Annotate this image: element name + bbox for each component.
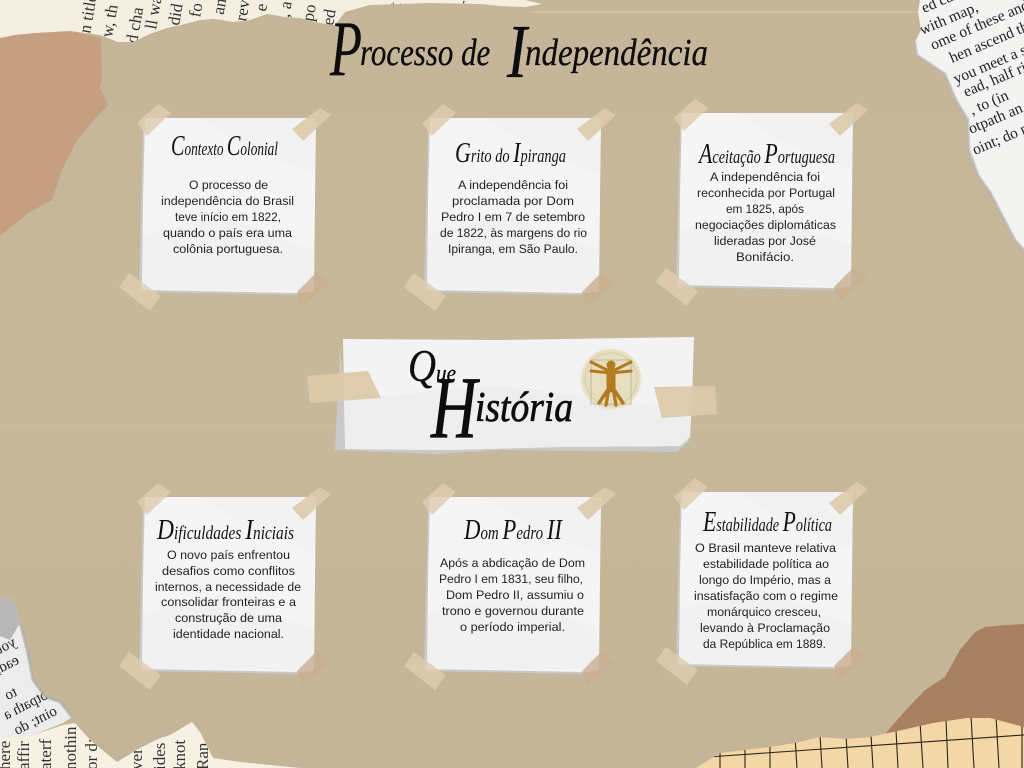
body text: consolidar fronteiras e a [161,595,296,609]
body text: longo do Império, mas a [699,573,831,587]
torn brown paper bottom right [885,624,1024,735]
body text: O Brasil manteve relativa [695,541,836,555]
heading: Estabilidade Política [702,506,832,538]
body text: negociações diplomáticas [695,218,836,232]
body text: identidade nacional. [173,627,284,641]
note: Dificuldades Iniciais [119,483,331,690]
body text: reconhecida por Portugal [697,186,835,200]
body text: trono e governou durante [442,604,584,618]
body text: Pedro I em 7 de setembro [441,210,585,224]
banner paper [335,337,694,454]
script word História: H [430,360,480,457]
script word Que: Q [408,340,436,391]
body text: construção de uma [175,611,282,625]
body text [155,548,301,641]
tape right [654,386,717,418]
body text: teve início em 1822, [175,210,281,224]
note: Contexto Colonial [119,104,331,311]
torn book page top: , a [274,0,296,19]
torn book page top: w, th [97,3,122,39]
title: rocesso de [360,32,498,74]
body text: de 1822, às margens do rio [440,226,587,240]
script word História: istória [475,385,573,431]
body text: lideradas por José [714,234,816,248]
body text: Pedro I em 1831, seu filho, [439,572,583,586]
torn newspaper top right: otpath an [966,100,1024,138]
torn newspaper bottom left: oint; do [11,703,60,739]
torn book page top: e [251,2,271,13]
body text: insatisfação com o regime [694,589,838,603]
body text: monárquico cresceu, [707,605,821,619]
body text [161,178,294,256]
note: Aceitação Portuguesa [656,99,868,306]
body text [440,178,587,256]
grid paper bottom right [696,716,1024,768]
torn newspaper bottom left: otpath a [1,687,51,723]
body text: A independência foi [458,178,568,192]
torn newspaper bottom left: to [2,684,20,704]
note: Grito do Ipiranga [404,104,616,311]
torn newspaper top right: with map, [917,0,981,39]
body text: da República em 1889. [703,637,826,651]
icon: Vitruvian man seal [581,349,641,409]
body text: Dom Pedro II, assumiu o [446,588,584,602]
note: Estabilidade Política [656,478,868,685]
body text: internos, a necessidade de [155,580,301,594]
title: ndependência [525,32,708,74]
torn newspaper top right [915,0,1024,250]
torn brown paper top left [0,31,108,236]
note: Dom Pedro II [404,483,616,690]
body text: O processo de [189,178,268,192]
body text: colônia portuguesa. [173,242,283,256]
body text: A independência foi [710,170,820,184]
body text: desafios como conflitos [162,564,295,578]
heading: Dom Pedro II [463,514,563,546]
torn book page bottom left [0,722,300,768]
torn book page top: ed [318,7,340,27]
torn book page top [0,0,542,45]
torn newspaper top right: , to (in [967,87,1011,119]
body text: O novo país enfrentou [167,548,290,562]
body text: independência do Brasil [161,194,294,208]
body text: Bonifácio. [736,250,794,264]
tape left [307,371,381,403]
heading: Dificuldades Iniciais [156,514,294,546]
body text: estabilidade política ao [703,557,829,571]
body text: quando o país era uma [163,226,292,240]
heading: Aceitação Portuguesa [697,138,835,170]
body text: o período imperial. [460,620,565,634]
torn book page top: t [385,0,405,9]
torn book page top: d cha [122,5,147,45]
body text: Ipiranga, em São Paulo. [448,242,578,256]
torn newspaper bottom left [0,598,72,739]
torn book page top: fo [185,1,206,19]
title: I [506,10,530,94]
body text: levando à Proclamação [700,621,830,635]
banner: Que História [307,337,717,457]
torn book page top: did [164,2,187,27]
heading: Grito do Ipiranga [455,137,566,169]
body text: em 1825, após [726,202,804,216]
body text: Após a abdicação de Dom [440,556,585,570]
body text [695,170,836,264]
heading: Contexto Colonial [171,130,278,162]
title: P [329,5,362,92]
torn book page top: r [455,0,475,9]
body text [439,556,585,634]
body text [694,541,838,651]
script word Que: ue [436,361,456,387]
torn book page top: po [298,3,320,23]
body text: proclamada por Dom [452,194,574,208]
